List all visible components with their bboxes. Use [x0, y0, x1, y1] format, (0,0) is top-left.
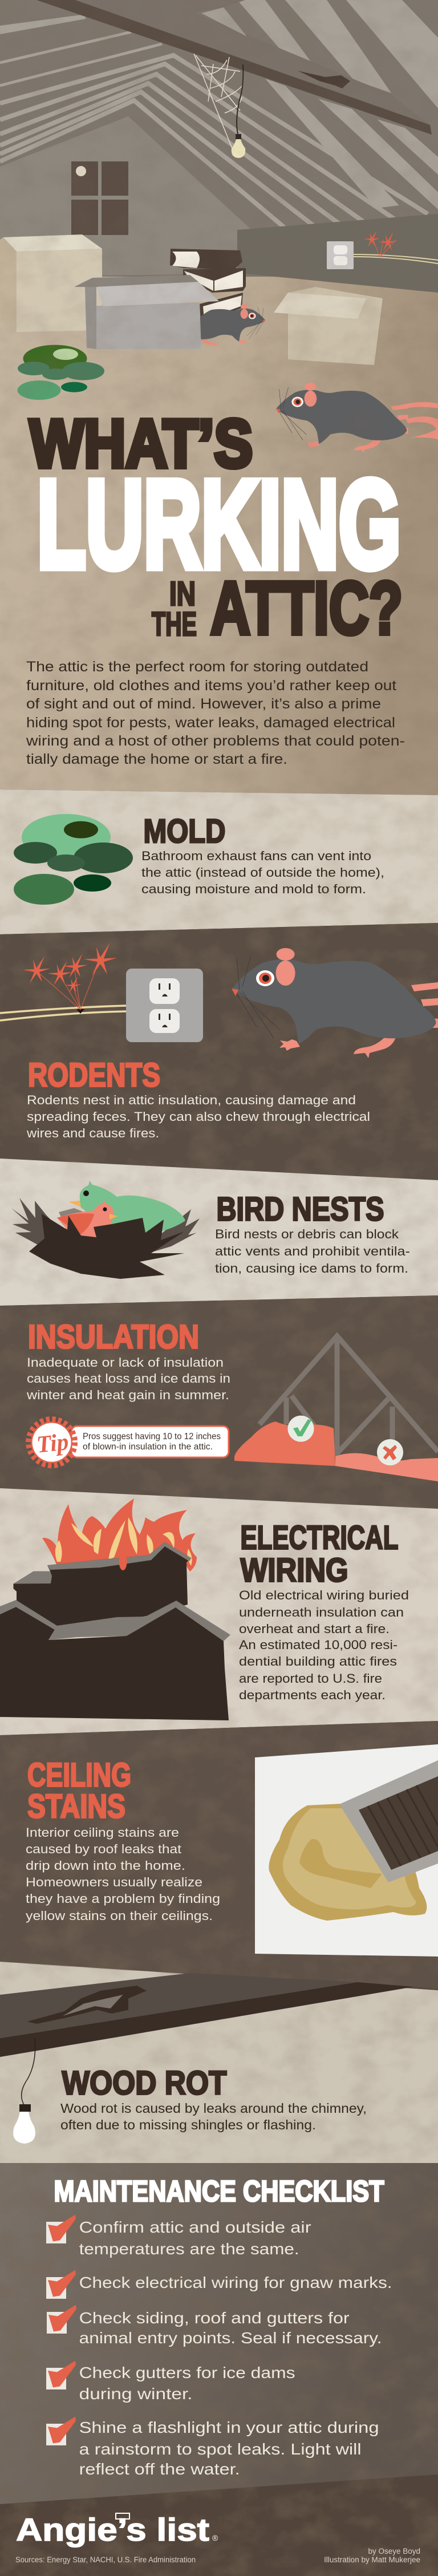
- attic scene illustration: [0, 0, 438, 453]
- text: bird nests: attic vents and prohibit ventila-: [215, 1244, 410, 1258]
- back wall: [0, 116, 251, 277]
- credits: by Oseye Boyd: [368, 2547, 420, 2555]
- credits: [324, 2547, 420, 2564]
- text: ceiling stains: Interior ceiling stains are: [26, 1825, 179, 1840]
- text: rodents: spreading feces. They can also chew through electrical: [27, 1109, 370, 1124]
- text: ceiling stains: they have a problem by finding: [26, 1892, 220, 1906]
- checklist item 3: animal entry points. Seal if necessary.: [79, 2329, 382, 2347]
- outlet and chewed wire: [327, 230, 438, 269]
- icon: birds in nest: [11, 1181, 200, 1279]
- text: wood rot: Wood rot is caused by leaks around the chimney,: [60, 2101, 367, 2116]
- heading: wood rot: WOOD ROT: [62, 2065, 227, 2101]
- text: electrical wiring: are reported to U.S. fire: [239, 1671, 382, 1686]
- callout: tip: Pros suggest having 10 to 12 inches: [83, 1432, 221, 1441]
- heading: mold: MOLD: [144, 813, 226, 850]
- title: IN: [169, 575, 196, 613]
- icon: mold: [14, 814, 133, 905]
- heading: bird nests: BIRD NESTS: [217, 1191, 384, 1228]
- illustration: rafter: [0, 1973, 438, 2057]
- text: insulation: Inadequate or lack of insulation: [27, 1355, 224, 1370]
- panel: bird nests: [11, 1181, 410, 1279]
- checklist item 5: [46, 2416, 379, 2478]
- intro text: The attic is the perfect room for storing outdated: [26, 659, 368, 675]
- icon: burning house: [0, 1498, 230, 1720]
- panel: maintenance checklist: [46, 2175, 392, 2478]
- text: insulation: causes heat loss and ice dams in: [27, 1371, 230, 1386]
- text: ceiling stains: [26, 1825, 220, 1923]
- text: electrical wiring: departments each year.: [239, 1688, 386, 1702]
- text: insulation: [26, 1355, 230, 1402]
- text: ceiling stains: drip down into the home.: [26, 1858, 185, 1873]
- heading: electrical wiring: WIRING: [241, 1552, 348, 1589]
- checklist item 1: temperatures are the same.: [79, 2240, 299, 2258]
- rat peeking from box: [185, 304, 265, 347]
- large rat: [276, 383, 438, 453]
- title: THE: [152, 606, 197, 643]
- checklist item 1: [46, 2214, 311, 2258]
- icon: rat: [232, 948, 438, 1058]
- checklist item 5: reflect off the water.: [79, 2460, 240, 2478]
- flames: [42, 1498, 197, 1571]
- mold patches: [18, 345, 104, 400]
- text: bird nests: tion, causing ice dams to form.: [215, 1261, 408, 1275]
- callout: tip: Tip: [35, 1429, 70, 1459]
- text: bird nests: [215, 1227, 410, 1275]
- panel: insulation: [26, 1319, 438, 1481]
- callout: tip: [29, 1420, 229, 1465]
- title: [30, 406, 403, 650]
- checklist item 2: Check electrical wiring for gnaw marks.: [79, 2274, 392, 2291]
- heading: rodents: RODENTS: [28, 1056, 160, 1094]
- text: wood rot: [60, 2101, 367, 2132]
- books: [170, 249, 246, 322]
- intro text: wiring and a host of other problems that could poten-: [26, 733, 405, 749]
- box: left: [0, 234, 102, 332]
- panel: rodents: [0, 943, 438, 1140]
- illustration: ceiling stain and vent: [255, 1744, 438, 1957]
- text: mold: the attic (instead of outside the home),: [141, 865, 384, 880]
- low side wall: [237, 214, 438, 293]
- checklist item 2: [46, 2270, 392, 2299]
- icon: outlet: [126, 969, 203, 1042]
- heading: electrical wiring: [241, 1520, 398, 1589]
- text: wood rot: often due to missing shingles or flashing.: [60, 2117, 316, 2132]
- intro text: of sight and out of mind. However, it’s also a prime: [26, 696, 381, 712]
- text: ceiling stains: caused by roof leaks that: [26, 1842, 182, 1856]
- panel: electrical wiring: [0, 1498, 409, 1720]
- intro text: hiding spot for pests, water leaks, damaged electrical: [26, 715, 395, 731]
- text: ceiling stains: yellow stains on their ceilings.: [26, 1909, 213, 1923]
- text: insulation: winter and heat gain in summer.: [26, 1388, 229, 1402]
- icon: roof truss with insulation comparison: [234, 1335, 438, 1481]
- text: ceiling stains: Homeowners usually realize: [26, 1875, 202, 1889]
- footer: [15, 2512, 420, 2564]
- checklist item 1: Confirm attic and outside air: [79, 2218, 311, 2236]
- heading: ceiling stains: STAINS: [27, 1788, 125, 1825]
- checklist item 4: Check gutters for ice dams: [79, 2364, 295, 2381]
- text: rodents: wires and cause fires.: [26, 1126, 159, 1140]
- logo: Angie's list: ®: [212, 2533, 218, 2542]
- text: electrical wiring: underneath insulation can: [239, 1605, 404, 1619]
- box: right: [274, 287, 383, 365]
- intro text: tially damage the home or start a fire.: [26, 751, 287, 767]
- text: mold: [141, 849, 384, 896]
- icon: bare light bulb: [13, 2038, 35, 2144]
- logo: Angie's list: Angie’s list: [16, 2512, 209, 2547]
- heading: ceiling stains: [27, 1757, 131, 1825]
- text: electrical wiring: overheat and start a fire.: [239, 1622, 390, 1636]
- checklist item 3: Check siding, roof and gutters for: [79, 2309, 350, 2327]
- checklist item 5: Shine a flashlight in your attic during: [79, 2419, 379, 2436]
- intro text: [26, 659, 405, 767]
- box: gray open: [74, 275, 219, 349]
- text: electrical wiring: An estimated 10,000 resi-: [239, 1638, 398, 1652]
- text: mold: causing moisture and mold to form.: [141, 882, 366, 896]
- text: mold: Bathroom exhaust fans can vent into: [141, 849, 371, 863]
- window: [71, 161, 128, 235]
- spider web: [194, 54, 242, 148]
- panel: wood rot: [0, 1973, 438, 2144]
- text: electrical wiring: [239, 1588, 409, 1702]
- panel: mold: [14, 813, 384, 905]
- text: electrical wiring: dential building attic fires: [239, 1654, 397, 1668]
- sources: Sources: Energy Star, NACHI, U.S. Fire Administration: [15, 2555, 196, 2564]
- checklist item 4: [46, 2360, 295, 2403]
- ceiling: [0, 0, 438, 277]
- heading: ceiling stains: CEILING: [27, 1757, 131, 1793]
- dark band texture overlay: [2, 941, 438, 2576]
- title: WHAT’S: [30, 406, 253, 481]
- intro text: furniture, old clothes and items you’d rather keep out: [26, 678, 396, 694]
- hanging light bulb: [232, 64, 245, 158]
- text: electrical wiring: Old electrical wiring buried: [239, 1588, 409, 1602]
- checklist item 5: a rainstorm to spot leaks. Light will: [79, 2440, 362, 2458]
- roof rafter beam: [36, 0, 432, 135]
- panel: ceiling stains: [26, 1744, 438, 1957]
- icon: chewed wires with sparks: [0, 943, 126, 1020]
- callout: tip: of blown-in insulation in the attic.: [83, 1442, 213, 1452]
- checklist item 4: during winter.: [79, 2385, 193, 2403]
- heading: insulation: INSULATION: [28, 1319, 199, 1355]
- credits: Illustration by Matt Mukerjee: [324, 2555, 420, 2564]
- text: bird nests: Bird nests or debris can block: [215, 1227, 399, 1241]
- text: rodents: Rodents nest in attic insulation, causing damage and: [27, 1093, 356, 1107]
- text: rodents: [26, 1093, 370, 1140]
- checklist item 3: [47, 2304, 382, 2347]
